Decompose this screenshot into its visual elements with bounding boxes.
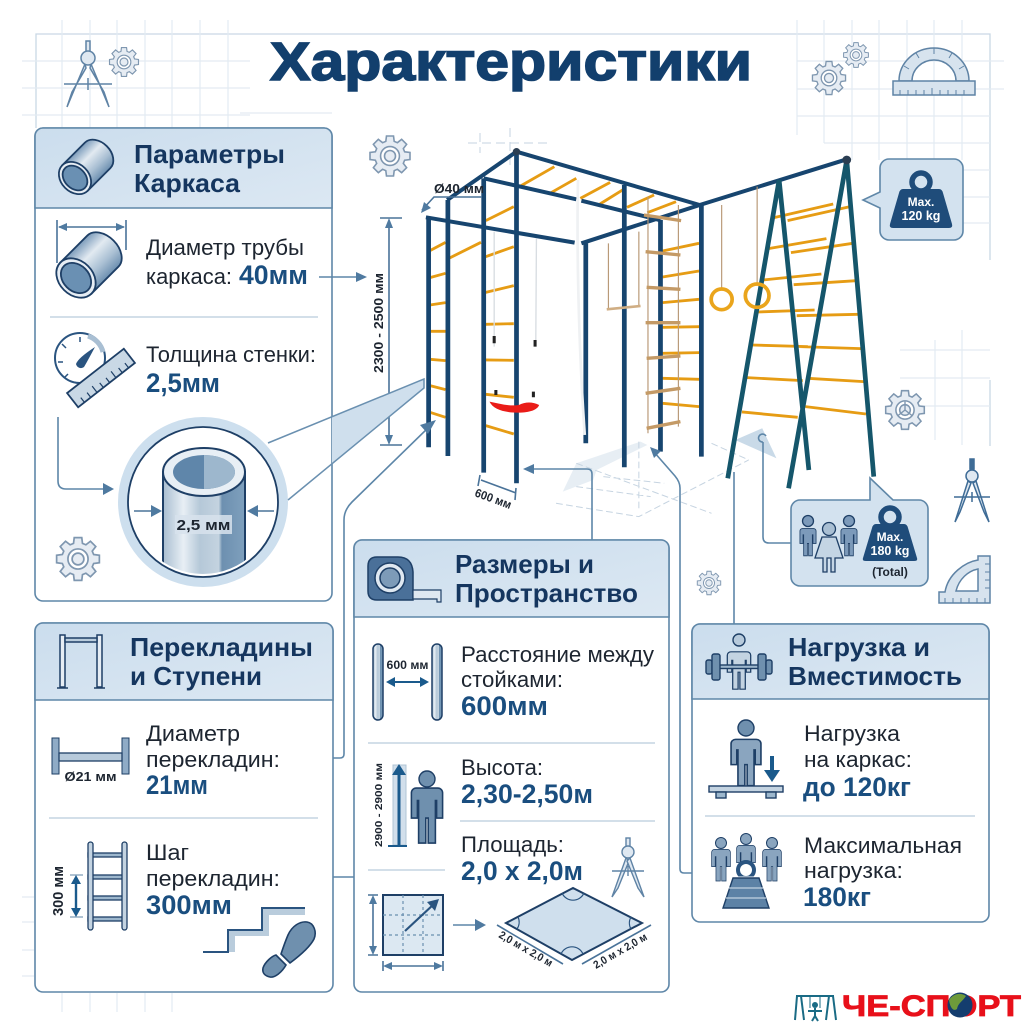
icon: gear top left xyxy=(110,48,138,76)
icon: weight 180 kg xyxy=(863,508,917,561)
value: 40 mm: 40мм xyxy=(239,260,308,290)
icon: tape measure xyxy=(368,557,441,602)
logo wordmark: ЧЕ-СПОРТ xyxy=(842,990,1021,1023)
icon: weight 180 kg: 180 kg xyxy=(871,544,909,558)
text: wall thickness: Толщина стенки: xyxy=(146,342,316,367)
text: area: Площадь: xyxy=(461,832,564,857)
label: total: (Total) xyxy=(872,565,908,579)
text: crossbar diameter line 2: перекладин: xyxy=(146,747,280,772)
value: 180 kg: 180кг xyxy=(803,882,871,912)
panel: sizes and space xyxy=(354,540,669,992)
logo xyxy=(795,990,1021,1023)
panel header xyxy=(692,624,989,699)
icon: family xyxy=(800,516,857,572)
logo icon: swing xyxy=(795,996,836,1021)
label: pipe diameter: Ø40 мм xyxy=(434,181,484,196)
text: height: Высота: xyxy=(461,755,543,780)
heading: Размеры и xyxy=(455,549,594,579)
connector: rung diameter to frame xyxy=(293,420,436,763)
icon: people and weight xyxy=(712,834,781,908)
magnifier: wall thickness detail xyxy=(123,422,283,582)
icon: weight 120 kg: 120 kg xyxy=(902,209,940,223)
icon: posts spacing: 600 мм xyxy=(386,660,428,672)
icon: gear top right lower xyxy=(812,61,846,95)
text: step line 2: перекладин: xyxy=(146,866,280,891)
icon: weight 120 kg: Max. xyxy=(908,195,934,209)
top beams xyxy=(426,152,847,243)
panel: crossbars and steps xyxy=(35,623,333,992)
icon: floor diamond: 2,0 м x 2,0 м xyxy=(592,931,649,972)
magnifier: wall thickness detail: 2,5 мм xyxy=(176,517,230,534)
label: span between posts xyxy=(473,475,516,512)
value: 21 mm: 21мм xyxy=(146,770,208,800)
value: area: 2,0 x 2,0м xyxy=(461,856,583,886)
icon: ladder step xyxy=(51,842,127,930)
rope ladder xyxy=(644,197,681,433)
swing frame rungs xyxy=(742,204,866,417)
arrow: to magnifier xyxy=(58,417,114,495)
icon: compass right xyxy=(954,459,990,522)
frame joints xyxy=(513,148,851,164)
icon: set square right xyxy=(939,556,990,603)
value: 300 mm: 300мм xyxy=(146,890,232,920)
text: frame load line 2: на каркас: xyxy=(804,747,912,772)
connector: panel 3 to frame xyxy=(523,464,592,540)
arrow: plan to floor xyxy=(453,919,486,931)
connector: panel 4 load to ladder xyxy=(650,447,692,873)
swing xyxy=(489,232,539,413)
callout: max 120 kg xyxy=(863,159,963,240)
icon: gear right xyxy=(886,391,924,429)
panel: load and capacity xyxy=(692,624,989,922)
connector: panel 4 to frame xyxy=(733,472,735,624)
icon: floor diamond xyxy=(496,888,651,972)
icon: small gear xyxy=(697,571,721,595)
text: max load line 2: нагрузка: xyxy=(804,858,903,883)
connector: rung step xyxy=(295,872,354,882)
icon: weight 180 kg: Max. xyxy=(877,530,903,544)
connector: pipe diameter xyxy=(319,272,367,282)
icon: protractor top right xyxy=(893,48,975,95)
heading: Нагрузка и xyxy=(788,632,930,662)
trapeze bar xyxy=(607,232,641,309)
heading line 2: Вместимость xyxy=(788,661,962,691)
icon: person on platform xyxy=(709,720,783,798)
panel header xyxy=(354,540,669,617)
title: Характеристики xyxy=(270,32,752,92)
icon: height and person xyxy=(373,763,443,847)
icon: height and person: 2900 - 2900 мм xyxy=(373,763,385,847)
diagram: sports complex frame xyxy=(426,148,874,517)
heading line 2: Пространство xyxy=(455,578,638,608)
climbing rope xyxy=(578,180,585,435)
connector: callout 180 kg xyxy=(759,434,791,543)
text: crossbar diameter: Диаметр xyxy=(146,721,240,746)
heading line 2: и Ступени xyxy=(130,661,262,691)
logo globe xyxy=(948,992,972,1018)
panel header xyxy=(35,623,333,700)
heading: Перекладины xyxy=(130,632,313,662)
icon: pipe diameter xyxy=(48,220,129,306)
posts xyxy=(429,152,701,483)
icon: stairs xyxy=(203,908,305,952)
value: 2.5 mm: 2,5мм xyxy=(146,368,220,398)
gymnastic rings xyxy=(711,187,769,310)
callout: max 180 kg total xyxy=(791,478,928,586)
icon: ladder step: 300 мм xyxy=(51,866,67,916)
orange rungs xyxy=(430,167,699,434)
dimension: frame height xyxy=(371,218,402,445)
A-frames xyxy=(728,160,874,488)
icon: barbell lifter xyxy=(706,634,772,689)
icon: floor diamond: 2,0 м x 2,0 м xyxy=(496,929,554,970)
floor layout xyxy=(556,428,776,517)
callout wedge: wall thickness to frame xyxy=(268,379,424,500)
label: span between posts: 600 мм xyxy=(473,486,514,512)
text: max load: Максимальная xyxy=(804,833,962,858)
text: distance line 2: стойками: xyxy=(461,667,563,692)
icon: gauge and ruler xyxy=(55,333,135,407)
panel header xyxy=(35,128,332,208)
dimension: frame height: 2300 - 2500 мм xyxy=(371,273,386,373)
icon: square plan xyxy=(368,895,443,971)
icon: crossbar xyxy=(57,635,105,688)
heading line 2: Каркаса xyxy=(134,168,241,198)
icon: posts spacing xyxy=(373,644,442,720)
icon: weight 120 kg xyxy=(890,173,952,228)
value: 600 mm: 600мм xyxy=(461,691,548,721)
icon: shoe print xyxy=(263,922,315,977)
text: frame load: Нагрузка xyxy=(804,721,900,746)
text: pipe diameter: Диаметр трубы xyxy=(146,235,304,260)
panel: frame parameters xyxy=(35,128,332,601)
heading: Параметры xyxy=(134,139,285,169)
icon: pipe xyxy=(52,133,120,201)
icon: gear near frame xyxy=(370,136,410,176)
text: pipe diameter line 2: каркаса: xyxy=(146,264,232,289)
value: height: 2,30-2,50м xyxy=(461,779,593,809)
text: distance between posts: Расстояние между xyxy=(461,642,655,667)
icon: crossbar diameter xyxy=(52,738,129,784)
icon: compass xyxy=(612,838,644,897)
text: step: Шаг xyxy=(146,840,189,865)
label: pipe diameter xyxy=(421,181,484,213)
icon: gear top right upper xyxy=(844,43,868,67)
value: up to 120 kg: до 120кг xyxy=(803,772,911,802)
icon: compass top left xyxy=(64,41,112,107)
icon: gear xyxy=(57,538,99,580)
icon: crossbar diameter: Ø21 мм xyxy=(64,769,116,784)
